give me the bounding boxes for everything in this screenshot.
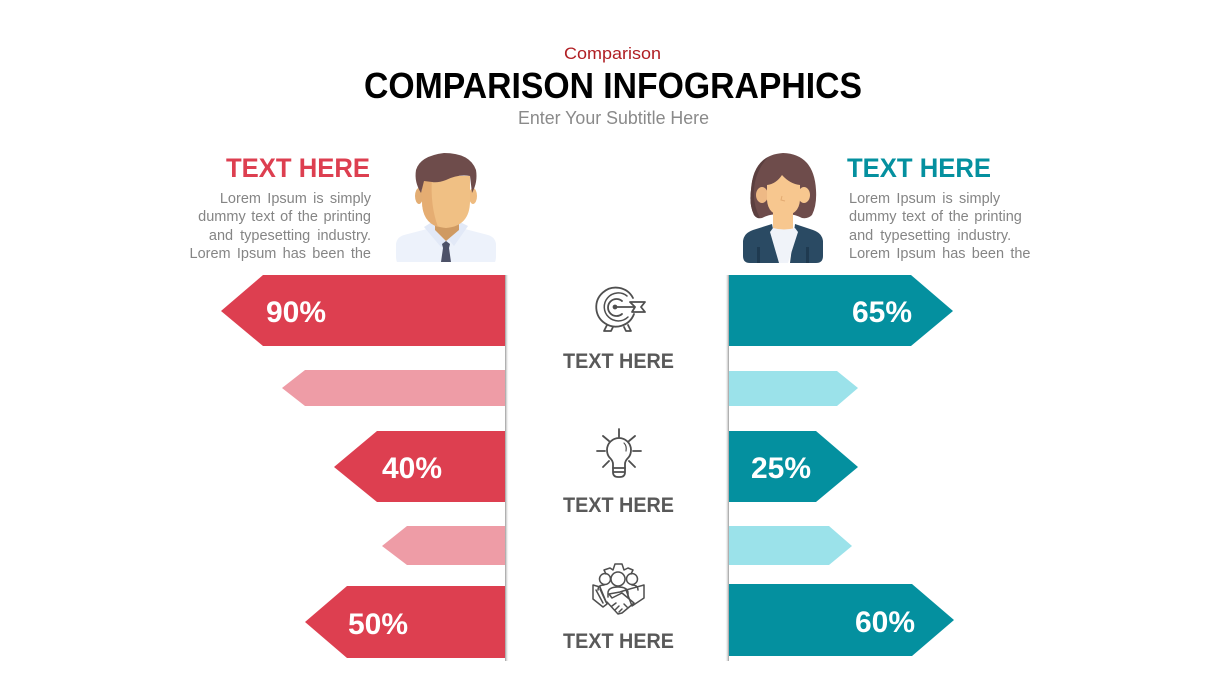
right paragraph: dummy text of the printing bbox=[849, 209, 1022, 225]
left bar 50% bbox=[305, 586, 505, 658]
left bar 40% bbox=[334, 431, 505, 502]
left paragraph: Lorem Ipsum has been the bbox=[190, 246, 371, 262]
right bar 65%: 65% bbox=[852, 296, 912, 329]
right paragraph: Lorem Ipsum is simply bbox=[849, 191, 1001, 207]
right bar 60%: 60% bbox=[855, 606, 915, 639]
label: bulb: TEXT HERE bbox=[563, 494, 674, 517]
left bar 90% bbox=[221, 275, 505, 346]
icon: target bbox=[596, 288, 645, 331]
right bar 25% bbox=[729, 431, 858, 502]
icon: teamwork handshake bbox=[593, 564, 644, 614]
left bar 40%: 40% bbox=[382, 452, 442, 485]
right bar 60% bbox=[729, 584, 954, 656]
left bar 90%: 90% bbox=[266, 296, 326, 329]
left light bar 1 bbox=[282, 370, 505, 406]
right light bar 2 bbox=[729, 526, 852, 565]
right paragraph: Lorem Ipsum has been the bbox=[849, 246, 1030, 262]
right heading: TEXT HERE bbox=[847, 153, 991, 183]
left paragraph bbox=[190, 191, 372, 262]
icon: man avatar bbox=[396, 153, 496, 262]
left paragraph: dummy text of the printing bbox=[198, 209, 371, 225]
label: target: TEXT HERE bbox=[563, 350, 674, 373]
subtitle: Enter Your Subtitle Here bbox=[518, 108, 709, 128]
right axis shadow bbox=[725, 275, 729, 661]
eyebrow: Comparison: Comparison bbox=[564, 44, 661, 63]
right paragraph bbox=[849, 191, 1030, 262]
right bar 65% bbox=[729, 275, 953, 346]
title: COMPARISON INFOGRAPHICS bbox=[364, 65, 862, 106]
right light bar 1 bbox=[729, 371, 858, 406]
right paragraph: and typesetting industry. bbox=[849, 228, 1011, 244]
left bar 50%: 50% bbox=[348, 608, 408, 641]
label: teamwork: TEXT HERE bbox=[563, 630, 674, 653]
left paragraph: and typesetting industry. bbox=[209, 228, 371, 244]
left axis shadow bbox=[505, 275, 509, 661]
panel: left heading and text bbox=[190, 153, 372, 262]
right bar 25%: 25% bbox=[751, 452, 811, 485]
left light bar 2 bbox=[382, 526, 505, 565]
icon: light bulb bbox=[597, 429, 641, 477]
left paragraph: Lorem Ipsum is simply bbox=[220, 191, 372, 207]
panel: right heading and text bbox=[847, 153, 1030, 262]
left heading: TEXT HERE bbox=[226, 153, 370, 183]
icon: woman avatar bbox=[743, 153, 823, 263]
